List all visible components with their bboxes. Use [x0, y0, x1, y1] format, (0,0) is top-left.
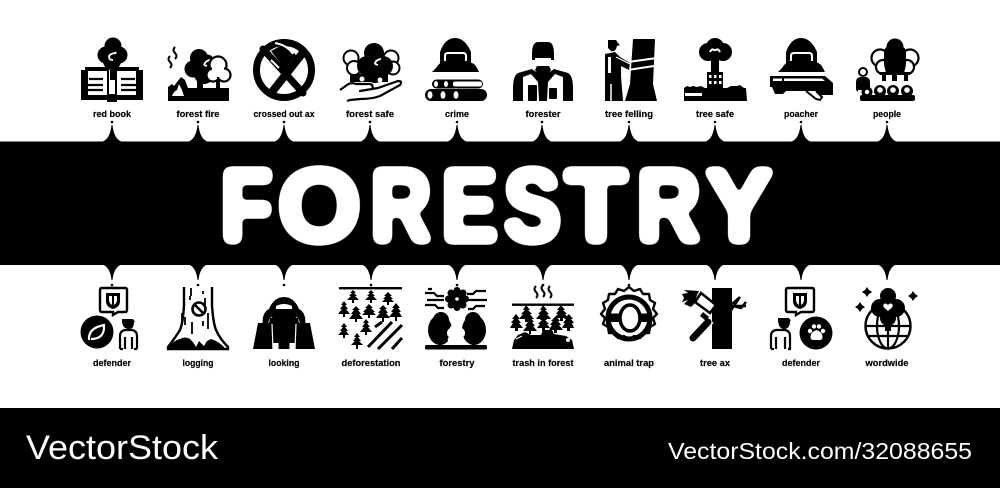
label: red book: red book: [93, 108, 132, 119]
icon: forest safe: [340, 43, 401, 101]
title: T: [565, 148, 627, 263]
icon: tree safe: [684, 38, 747, 101]
icon: red book: [81, 38, 143, 102]
icon: defender leaf: [80, 288, 137, 349]
label: logging: logging: [182, 357, 214, 368]
title: Y: [705, 148, 773, 263]
icon: crossed out ax: [256, 42, 312, 98]
label: forest fire: forest fire: [176, 108, 220, 119]
icon: forest fire: [168, 47, 230, 101]
label: forestry: forestry: [440, 357, 475, 368]
label: tree ax: tree ax: [700, 357, 731, 368]
label: people: people: [873, 108, 901, 119]
label: defender leaf: defender: [93, 357, 131, 368]
label: animal trap: animal trap: [604, 357, 654, 368]
label: poacher: poacher: [784, 108, 818, 119]
icon: tree felling: [605, 39, 657, 101]
icon: looking: [253, 297, 315, 349]
icon: people: [856, 38, 918, 101]
label: crossed out ax: crossed out ax: [254, 108, 315, 119]
footer band: [0, 408, 1000, 488]
footer logo text: VectorStock: [26, 429, 219, 467]
label: forest safe: forest safe: [346, 108, 394, 119]
label: looking: looking: [268, 357, 300, 368]
title: R: [371, 148, 431, 263]
icon: deforestation: [338, 287, 402, 349]
icon: forester: [513, 42, 573, 101]
icon: crime: [425, 38, 487, 101]
label: tree safe: tree safe: [696, 108, 734, 119]
icon: tree ax: [682, 288, 746, 349]
label: deforestation: deforestation: [342, 357, 401, 368]
icon: forestry: [425, 287, 487, 350]
label: defender paw: defender: [782, 357, 820, 368]
icon: defender paw: [771, 288, 832, 350]
icon: logging: [168, 287, 228, 350]
title: R: [637, 148, 701, 263]
icon: poacher: [770, 38, 833, 100]
central title band: [0, 121, 1000, 286]
label: crime: crime: [445, 108, 469, 119]
title: S: [504, 148, 560, 263]
icon: trash in forest: [510, 285, 574, 349]
label: trash in forest: trash in forest: [512, 357, 574, 368]
title: E: [442, 148, 497, 263]
title: O: [278, 148, 360, 263]
footer image id: VectorStock.com/32088655: [668, 438, 972, 464]
icon: wordwide: [855, 287, 918, 349]
title: F: [221, 148, 272, 263]
label: forester: forester: [526, 108, 561, 119]
icon: animal trap: [601, 287, 657, 340]
label: wordwide: wordwide: [865, 357, 908, 368]
label: tree felling: tree felling: [605, 108, 653, 119]
